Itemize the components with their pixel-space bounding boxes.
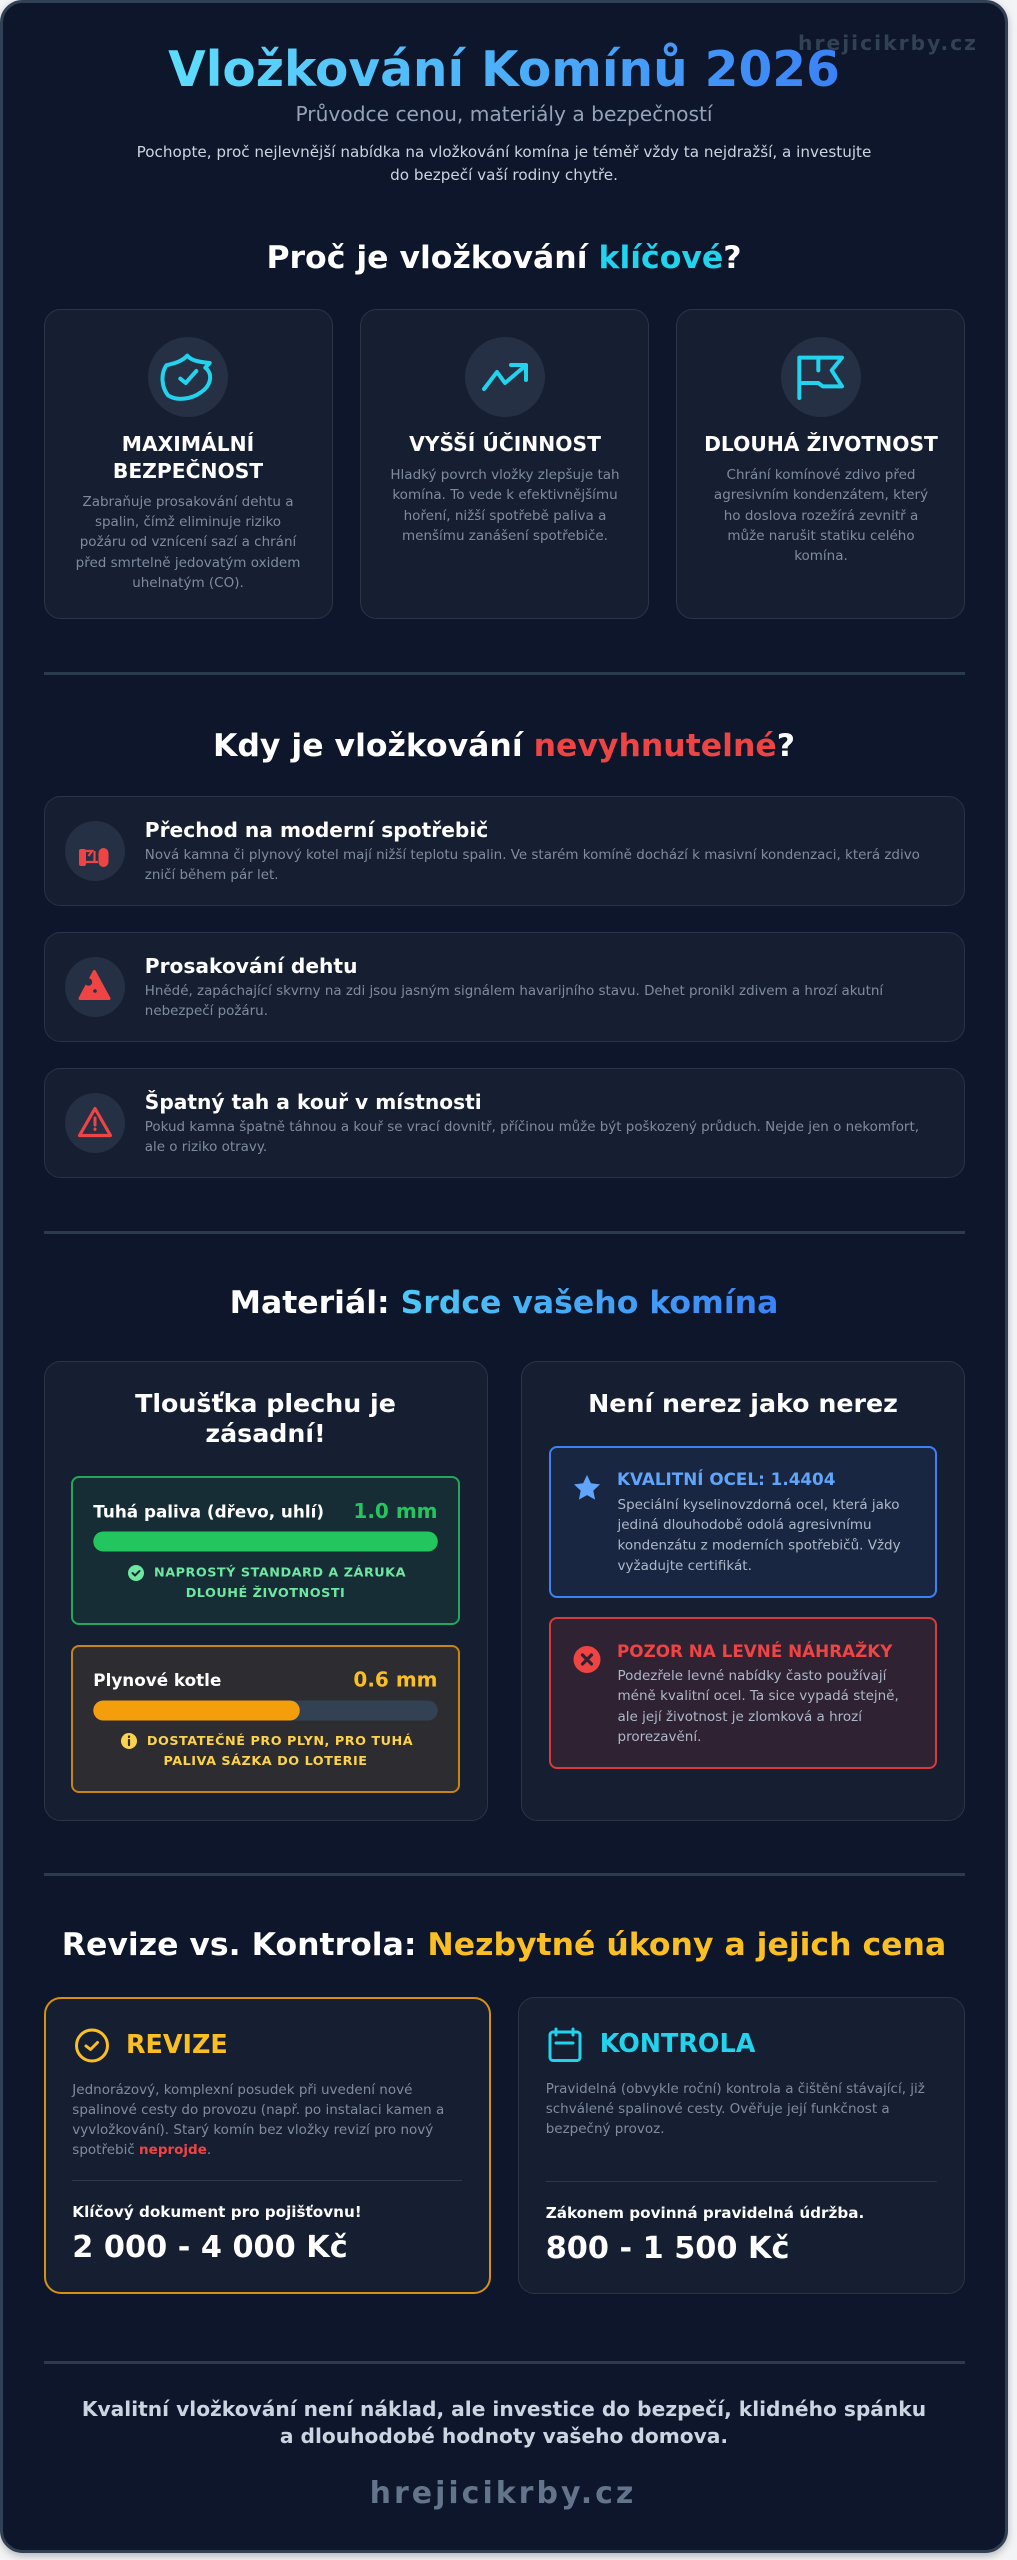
panel: safety: [44, 310, 332, 618]
icon: check: [128, 1565, 144, 1581]
quality steel box: Speciální kyselinovzdorná ocel, která jako: [618, 1497, 900, 1513]
safety text: požáru od vznícení sazí a chrání: [80, 534, 298, 550]
icon: calendar: [550, 2029, 580, 2060]
closing statement: a dlouhodobé hodnoty vašeho domova.: [280, 2424, 728, 2448]
panel: kontrola: [518, 1998, 964, 2294]
closing statement: [82, 2397, 926, 2448]
note: [147, 1733, 413, 1769]
lifespan text: může narušit statiku celého: [727, 528, 915, 544]
panel: sheet thickness: [44, 1362, 488, 1820]
footer brand: hrejicikrby.cz: [370, 2476, 636, 2511]
price: 2 000 - 4 000 Kč: [72, 2230, 348, 2265]
intro text: Pochopte, proč nejlevnější nabídka na vložkování komína je téměř vždy ta nejdražší, a investujte: [137, 143, 871, 161]
quality steel box: [550, 1447, 936, 1597]
text: [145, 847, 920, 883]
panel: draft: [44, 1068, 964, 1178]
text: ale o riziko otravy.: [145, 1140, 267, 1155]
lifespan heading: DLOUHÁ ŽIVOTNOST: [704, 432, 938, 456]
note: DOSTATEČNÉ PRO PLYN, PRO TUHÁ: [147, 1733, 413, 1749]
text: bezpečný provoz.: [546, 2121, 665, 2137]
safety text: [76, 494, 300, 591]
efficiency heading: VYŠŠÍ ÚČINNOST: [409, 432, 601, 456]
safety text: uhelnatým (CO).: [132, 575, 244, 591]
title: KONTROLA: [600, 2028, 756, 2058]
cheap substitutes box: POZOR NA LEVNÉ NÁHRAŽKY: [617, 1640, 893, 1661]
intro text: do bezpečí vaší rodiny chytře.: [390, 166, 618, 184]
title: Přechod na moderní spotřebič: [145, 818, 488, 842]
note: Klíčový dokument pro pojišťovnu!: [72, 2203, 362, 2221]
icon: appliance: [65, 821, 125, 881]
note: DLOUHÉ ŽIVOTNOSTI: [186, 1585, 345, 1601]
price: 800 - 1 500 Kč: [546, 2231, 789, 2266]
quality steel box: jediná dlouhodobě odolá agresivnímu: [616, 1517, 872, 1533]
icon: shield: [148, 337, 228, 417]
panel heading: [135, 1389, 396, 1448]
text: Pravidelná (obvykle roční) kontrola a čištění stávající, již: [546, 2081, 925, 2097]
panel heading: Není nerez jako nerez: [588, 1389, 898, 1418]
panel: modern appliance: [44, 796, 964, 906]
text: Pokud kamna špatně táhnou a kouř se vrací dovnitř, příčinou může být poškozený průduch. Nejde jen o nekomfort,: [145, 1119, 919, 1135]
lifespan text: komína.: [794, 548, 848, 564]
subtitle: Průvodce cenou, materiály a bezpečností: [295, 102, 714, 126]
panel heading: Tloušťka plechu je: [135, 1389, 396, 1418]
cheap substitutes box: Podezřele levné nabídky často používají: [618, 1668, 888, 1684]
text: Hnědé, zapáchající skvrny na zdi jsou jasným signálem havarijního stavu. Dehet pronikl zdivem a hrozí akutní: [145, 983, 884, 999]
text: [145, 1119, 919, 1155]
safety heading: BEZPEČNOST: [113, 459, 263, 483]
title: REVIZE: [126, 2029, 228, 2059]
safety text: spalin, čímž eliminuje riziko: [95, 514, 281, 530]
icon: flag: [781, 337, 861, 417]
solid fuels box: [72, 1477, 459, 1624]
text: Nová kamna či plynový kotel mají nižší teplotu spalin. Ve starém komíně dochází k masivní kondenzaci, která zdivo: [145, 847, 920, 863]
text: nebezpečí požáru.: [145, 1003, 268, 1019]
icon: info: [121, 1733, 137, 1749]
watermark top right: hrejicikrby.cz: [798, 31, 978, 55]
bar solid fuels: [93, 1532, 438, 1552]
safety text: Zabraňuje prosakování dehtu a: [82, 494, 294, 510]
solid fuels box: 1.0 mm: [353, 1499, 438, 1523]
gas boilers box: [72, 1646, 459, 1792]
heading: why: Proč je vložkování klíčové?: [266, 240, 742, 276]
icon: trend arrow: [465, 337, 545, 417]
panel: tar: [44, 932, 964, 1042]
panel heading: zásadní!: [205, 1419, 326, 1448]
quality steel box: vyžadujte certifikát.: [618, 1558, 752, 1574]
cheap substitutes box: [550, 1618, 936, 1768]
safety text: před smrtelně jedovatým oxidem: [76, 555, 300, 571]
cheap substitutes box: prorezavění.: [618, 1729, 701, 1745]
safety heading: MAXIMÁLNÍ: [122, 432, 254, 456]
gas boilers box: 0.6 mm: [353, 1668, 438, 1692]
note: PALIVA SÁZKA DO LOTERIE: [164, 1753, 367, 1769]
safety heading: [113, 432, 263, 483]
note: Zákonem povinná pravidelná údržba.: [546, 2204, 864, 2222]
efficiency text: Hladký povrch vložky zlepšuje tah: [390, 467, 620, 483]
text: zničí během pár let.: [145, 867, 279, 883]
icon: tar drop: [65, 957, 125, 1017]
text: Jednorázový, komplexní posudek při uvedení nové: [71, 2082, 412, 2098]
icon: check circle: [76, 2030, 108, 2061]
heading: revision vs check: Revize vs. Kontrola: Nezbytné úkony a jejich cena: [62, 1927, 946, 1963]
text: [145, 983, 884, 1019]
gas boilers box: Plynové kotle: [93, 1670, 221, 1690]
icon: star: [574, 1475, 600, 1500]
header: [137, 42, 871, 184]
lifespan text: Chrání komínové zdivo před: [727, 467, 915, 483]
efficiency text: [390, 467, 620, 544]
bar gas fill: [93, 1700, 300, 1720]
title: Vložkování Komínů 2026: [168, 42, 840, 98]
note: NAPROSTÝ STANDARD A ZÁRUKA: [154, 1564, 406, 1580]
text: spalinové cesty do provozu (např. po instalaci kamen a: [72, 2102, 444, 2118]
title: Špatný tah a kouř v místnosti: [145, 1090, 482, 1114]
cheap substitutes box: ale její životnost je zlomková a hrozí: [618, 1709, 863, 1725]
icon: cross: [574, 1646, 600, 1673]
text: [546, 2081, 925, 2137]
panel: revize: [45, 1998, 490, 2293]
efficiency text: menšímu zanášení spotřebiče.: [402, 528, 608, 544]
efficiency text: hoření, nižší spotřebě paliva a: [404, 508, 606, 524]
solid fuels box: Tuhá paliva (dřevo, uhlí): [93, 1502, 324, 1522]
quality steel box: KVALITNÍ OCEL: 1.4404: [617, 1468, 835, 1489]
heading: when: Kdy je vložkování nevyhnutelné?: [213, 728, 795, 764]
bar gas track: [93, 1700, 438, 1720]
title: Prosakování dehtu: [145, 954, 357, 978]
intro text: [137, 143, 871, 184]
heading: material: Materiál: Srdce vašeho komína: [230, 1285, 778, 1321]
quality steel box: kondenzátu z moderních spotřebičů. Vždy: [618, 1538, 901, 1554]
text: schválené spalinové cesty. Ověřuje její funkčnost a: [546, 2101, 890, 2117]
text: vyvložkování). Starý komín bez vložky revizí pro nový: [72, 2122, 433, 2138]
text: [71, 2082, 444, 2158]
closing statement: Kvalitní vložkování není náklad, ale investice do bezpečí, klidného spánku: [82, 2397, 926, 2421]
text: spotřebič neprojde.: [72, 2142, 211, 2158]
cheap substitutes box: méně kvalitní ocel. Ta sice vypadá stejně,: [618, 1688, 899, 1704]
lifespan text: [714, 467, 928, 564]
panel: efficiency: [360, 310, 648, 618]
note: [154, 1564, 406, 1601]
lifespan text: agresivním kondenzátem, který: [714, 487, 928, 503]
icon: warning: [65, 1093, 125, 1153]
panel: stainless grades: [522, 1362, 964, 1820]
panel: lifespan: [676, 310, 964, 618]
efficiency text: komína. To vede k efektivnějšímu: [392, 487, 618, 503]
lifespan text: ho doslova rozežírá zevnitř a: [724, 508, 918, 524]
